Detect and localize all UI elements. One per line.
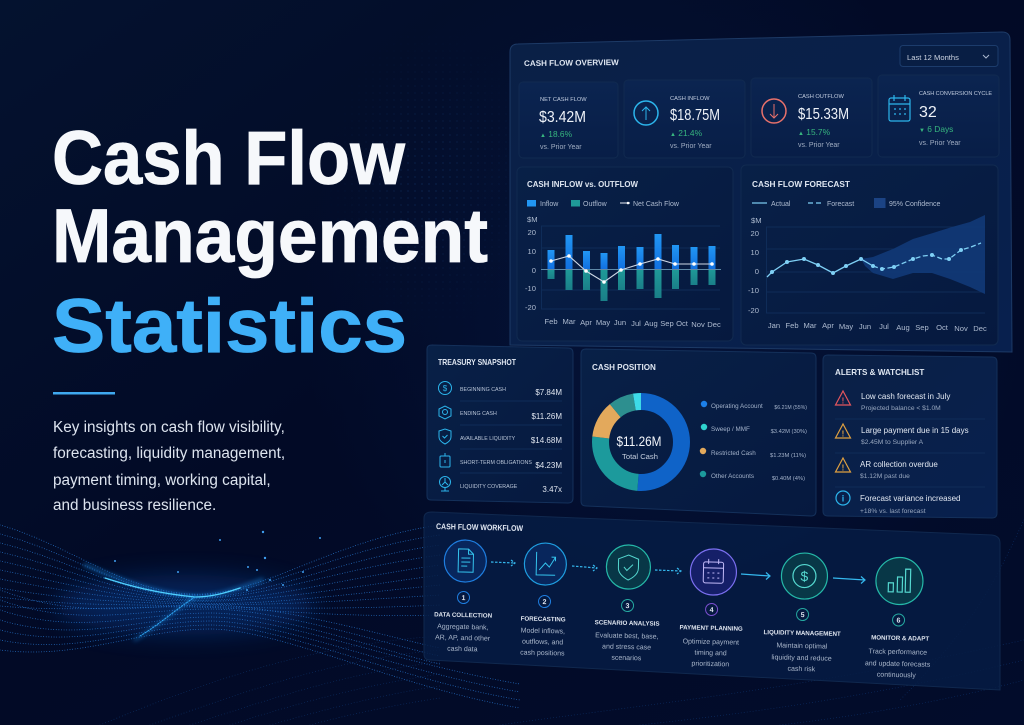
row: short-term obligations: $4.23M [535, 461, 562, 470]
month labels: Mar [803, 321, 817, 330]
axis labels: 0 [532, 266, 536, 275]
step 6: monitor and adapt: MONITOR & ADAPT [871, 634, 929, 643]
step 5: liquidity management: cash risk [787, 666, 816, 673]
axis labels: $M [751, 216, 762, 225]
step 2: forecasting [520, 543, 568, 658]
step 1: data collection: AR, AP, and other [435, 634, 491, 643]
month labels: Jul [879, 322, 889, 331]
month labels: Sep [915, 323, 929, 332]
panel: cash inflow vs outflow chart [517, 167, 733, 341]
legend: operating account: Operating Account [711, 403, 763, 410]
KPI card: cash conversion cycle: CASH CONVERSION CYCLE [919, 91, 992, 97]
alert: large payment due: Large payment due in 15 days [861, 426, 969, 435]
alert: large payment due [836, 424, 969, 446]
step 1: data collection: 1 [461, 595, 466, 602]
legend: other accounts [700, 471, 805, 482]
KPI card: cash outflow: ▲ 15.7% [798, 127, 831, 137]
panel: cash flow forecast chart [741, 165, 998, 345]
month labels: Aug [644, 319, 658, 328]
legend: sweep / mmf: Sweep / MMF [711, 426, 750, 433]
step 1: data collection: DATA COLLECTION [434, 611, 493, 620]
intro text: forecasting, liquidity management, [53, 445, 285, 462]
dropdown: last 12 months [900, 46, 998, 66]
month labels: Apr [822, 321, 834, 330]
heading: TREASURY SNAPSHOT [438, 358, 516, 367]
legend: Forecast [827, 201, 854, 208]
KPI card: cash conversion cycle: ▼ 6 Days [919, 124, 953, 134]
intro text [53, 419, 285, 514]
alert: large payment due: $2.45M to Supplier A [861, 439, 924, 446]
alert: forecast variance: Forecast variance increased [860, 494, 960, 503]
step 2: forecasting: 2 [542, 599, 547, 606]
alert: forecast variance: i [842, 494, 844, 504]
step 6: monitor and adapt: continuously [877, 672, 916, 679]
step 5: liquidity management: Maintain optimal [776, 642, 828, 651]
arrow [655, 568, 681, 574]
heading: ALERTS & WATCHLIST [835, 368, 924, 377]
row: available liquidity: $14.68M [531, 436, 562, 445]
month labels: Jun [614, 318, 626, 327]
month labels: Feb [785, 321, 799, 330]
KPI card: net cash flow: $3.42M [539, 109, 586, 126]
step 3: scenario analysis: SCENARIO ANALYSIS [595, 619, 660, 628]
KPI card: net cash flow: NET CASH FLOW [540, 97, 587, 103]
row: beginning cash: BEGINNING CASH [460, 387, 506, 393]
heading: CASH FLOW WORKFLOW [436, 522, 523, 533]
title: Management [52, 194, 488, 279]
legend: Actual [771, 201, 791, 208]
month labels: Feb [544, 317, 558, 326]
axis labels: 20 [528, 228, 536, 237]
donut chart [600, 402, 682, 482]
legend [752, 198, 940, 208]
step 5: liquidity management [763, 552, 843, 674]
axis labels: 20 [751, 229, 759, 238]
step 2: forecasting: Model inflows, [521, 627, 565, 636]
legend: sweep / mmf: $3.42M (30%) [771, 429, 807, 435]
step 1: data collection: cash data [447, 646, 478, 653]
legend: 95% Confidence [889, 201, 940, 208]
legend: Outflow [583, 201, 608, 208]
month labels: Dec [707, 320, 721, 329]
month labels: Nov [691, 320, 705, 329]
month labels: May [839, 322, 853, 331]
month labels: Aug [896, 323, 910, 332]
axis labels [525, 215, 538, 312]
axis labels: 10 [751, 248, 759, 257]
legend: Inflow [540, 201, 559, 208]
axis labels: 10 [528, 247, 536, 256]
alert: AR collection overdue: ! [842, 464, 844, 472]
row: ending cash: ENDING CASH [460, 411, 497, 417]
KPI card: cash conversion cycle: vs. Prior Year [919, 140, 961, 147]
step 3: scenario analysis [594, 544, 661, 663]
step 2: forecasting: cash positions [520, 649, 565, 658]
title [52, 116, 488, 369]
row: beginning cash [438, 382, 562, 397]
axis labels: $M [527, 215, 538, 224]
heading: cash flow overview: CASH FLOW OVERVIEW [524, 58, 619, 68]
month labels: Oct [676, 319, 689, 328]
row: liquidity coverage [440, 476, 562, 494]
month labels: Oct [936, 323, 949, 332]
KPI card: cash inflow [624, 80, 745, 158]
month labels: Dec [973, 324, 987, 333]
row: available liquidity [439, 429, 562, 445]
heading: CASH POSITION [592, 363, 656, 372]
KPI card: cash outflow: CASH OUTFLOW [798, 94, 844, 100]
KPI card: cash outflow [751, 78, 872, 157]
step 4: payment planning: 4 [710, 607, 714, 614]
arrow [572, 565, 597, 571]
step 5: liquidity management: LIQUIDITY MANAGEMENT [763, 629, 841, 638]
month labels: Jul [631, 319, 641, 328]
legend: operating account: $6.21M (55%) [774, 405, 807, 411]
KPI card: net cash flow: ▲ 18.6% [540, 129, 573, 139]
step 4: payment planning: prioritization [691, 661, 729, 668]
step 2: forecasting: outflows, and [522, 639, 563, 646]
alert: low cash forecast: ! [842, 396, 844, 406]
month labels: Jun [859, 322, 871, 331]
step 5: liquidity management: liquidity and reduce [771, 654, 832, 663]
icon: calendar [889, 95, 910, 121]
month labels: Jan [768, 321, 780, 330]
intro text: Key insights on cash flow visibility, [53, 419, 285, 436]
alert: large payment due: ! [842, 430, 844, 438]
step 4: payment planning: timing and [694, 650, 727, 657]
alert: low cash forecast [836, 391, 950, 412]
forecast line [871, 243, 981, 271]
step 6: monitor and adapt: Track performance [869, 648, 927, 657]
step 4: payment planning: Optimize payment [683, 638, 739, 647]
panel: alerts and watchlist [823, 355, 997, 518]
step 3: scenario analysis: 3 [626, 603, 630, 610]
arrow [491, 560, 515, 566]
icon: bar chart [875, 557, 923, 605]
step 2: forecasting: FORECASTING [521, 615, 566, 624]
axis labels: 0 [755, 267, 759, 276]
step 6: monitor and adapt: and update forecasts [865, 660, 931, 669]
accent divider [53, 392, 115, 394]
alert: forecast variance [836, 491, 960, 515]
step 4: payment planning [679, 548, 745, 669]
alert: low cash forecast: Projected balance < $1.0M [861, 405, 941, 412]
intro text: payment timing, working capital, [53, 472, 271, 489]
legend: other accounts: Other Accounts [711, 473, 754, 480]
legend: restricted cash: $1.23M (11%) [770, 453, 806, 459]
month labels: Mar [562, 317, 576, 326]
month labels: Apr [580, 318, 592, 327]
dropdown: last 12 months: Last 12 Months [907, 53, 959, 62]
title: Statistics [52, 284, 407, 369]
alert: AR collection overdue [836, 458, 938, 480]
icon: dollar coin: $ [800, 568, 809, 584]
step 3: scenario analysis: Evaluate best, base, [595, 632, 659, 641]
legend: sweep / mmf [701, 424, 807, 435]
legend: other accounts: $0.40M (4%) [772, 476, 805, 482]
step 1: data collection [433, 539, 494, 654]
KPI card: cash inflow: CASH INFLOW [670, 96, 710, 102]
arrow [741, 572, 770, 580]
month labels: Sep [660, 319, 674, 328]
net cash flow line [549, 254, 714, 284]
KPI card: cash inflow: vs. Prior Year [670, 143, 712, 150]
icon: down arrow [762, 99, 786, 123]
step 3: scenario analysis: scenarios [611, 655, 642, 662]
KPI card: cash inflow: $18.75M [670, 107, 720, 124]
actual line [767, 257, 873, 277]
month labels [768, 321, 987, 333]
legend: operating account [701, 401, 807, 411]
alert: AR collection overdue: $1.12M past due [860, 473, 910, 480]
legend: Net Cash Flow [633, 201, 680, 208]
legend: restricted cash [700, 448, 806, 459]
step 5: liquidity management: 5 [801, 612, 805, 619]
row: beginning cash: $7.84M [535, 388, 562, 397]
legend [527, 200, 680, 208]
heading: CASH INFLOW vs. OUTFLOW [527, 180, 638, 189]
month labels: May [596, 318, 610, 327]
step 6: monitor and adapt: 6 [897, 617, 901, 625]
icon: calendar [690, 549, 737, 596]
bars [541, 234, 721, 301]
KPI card: cash conversion cycle [878, 75, 999, 157]
axis labels: -20 [748, 306, 759, 315]
icon: up arrow [634, 101, 658, 125]
step 6: monitor and adapt [865, 557, 933, 680]
KPI card: cash outflow: $15.33M [798, 106, 849, 123]
KPI card: net cash flow: vs. Prior Year [540, 144, 582, 151]
panel: cash flow workflow [424, 512, 1000, 690]
row: available liquidity: AVAILABLE LIQUIDITY [460, 436, 516, 442]
step 1: data collection: Aggregate bank, [437, 623, 489, 632]
heading: CASH FLOW FORECAST [752, 180, 850, 189]
KPI card: cash inflow: ▲ 21.4% [670, 128, 703, 138]
alert: forecast variance: +18% vs. last forecast [860, 508, 926, 515]
month labels: Nov [954, 324, 968, 333]
alert: AR collection overdue: AR collection overdue [860, 460, 938, 469]
icon: shield [606, 545, 651, 590]
arrow [833, 576, 865, 584]
KPI card: net cash flow [519, 82, 618, 158]
icon: line chart [524, 543, 567, 586]
row: liquidity coverage: LIQUIDITY COVERAGE [460, 484, 518, 490]
row: liquidity coverage: 3.47x [542, 485, 562, 494]
row: short-term obligations: SHORT-TERM OBLIGATIONS [460, 460, 532, 466]
donut chart: $11.26M [616, 433, 662, 449]
row: ending cash: $11.26M [531, 412, 562, 421]
step 4: payment planning: PAYMENT PLANNING [679, 624, 743, 633]
legend: restricted cash: Restricted Cash [711, 450, 756, 457]
row: beginning cash: $ [443, 384, 448, 393]
axis labels [748, 216, 762, 315]
alert: low cash forecast: Low cash forecast in July [861, 392, 950, 401]
donut chart: Total Cash [622, 452, 658, 461]
month labels [544, 317, 721, 329]
KPI card: cash conversion cycle: 32 [919, 104, 937, 121]
axis labels: -20 [525, 303, 536, 312]
confidence band [861, 215, 985, 294]
background [0, 0, 920, 526]
step 3: scenario analysis: and stress case [602, 643, 651, 652]
row: ending cash [439, 406, 562, 421]
axis labels: -10 [525, 284, 536, 293]
particle wave decoration [0, 520, 1024, 725]
icon: document [444, 540, 487, 583]
KPI card: cash outflow: vs. Prior Year [798, 142, 840, 149]
panel: treasury snapshot [427, 345, 573, 503]
intro text: and business resilience. [53, 497, 216, 514]
panel: cash position [581, 349, 816, 516]
row: short-term obligations [440, 453, 562, 470]
title: Cash Flow [52, 116, 406, 201]
panel: main dashboard [510, 32, 1012, 352]
axis labels: -10 [748, 286, 759, 295]
